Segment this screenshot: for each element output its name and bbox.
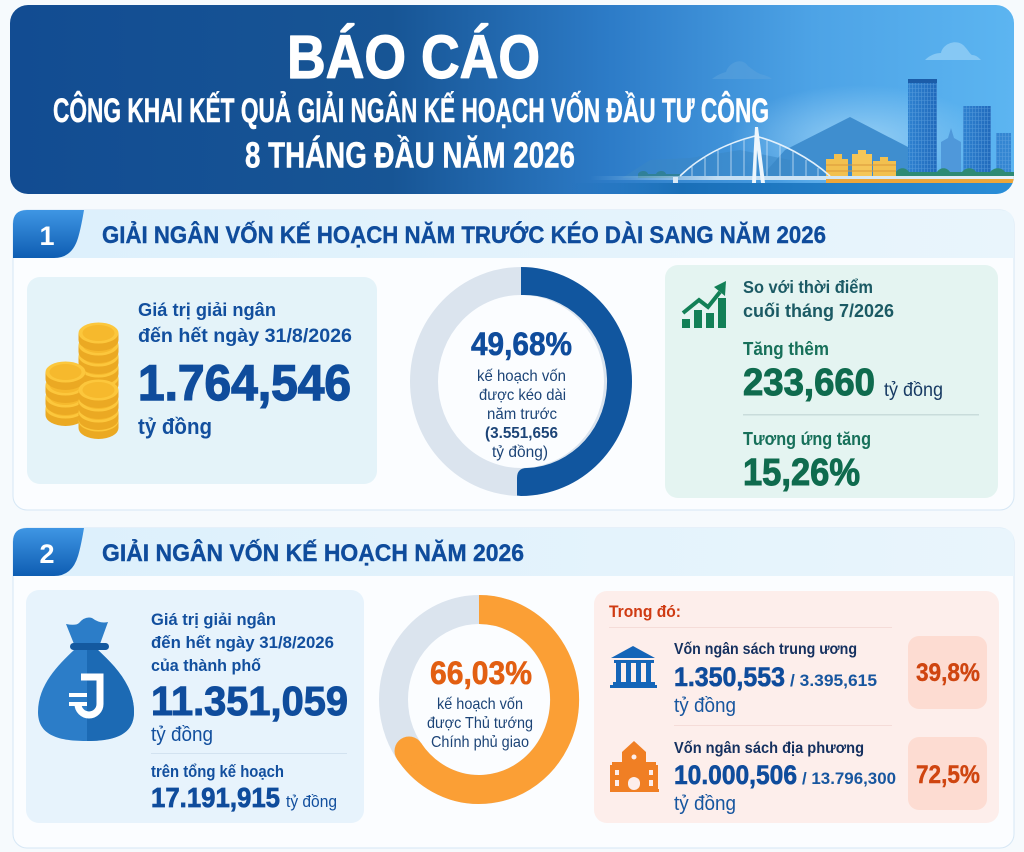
- breakdown heading: Trong đó:: [609, 602, 681, 621]
- city disbursement text: [151, 610, 348, 813]
- disbursement text: Giá trị giải ngân: [138, 299, 276, 320]
- comparison text: 233,660: [743, 362, 875, 404]
- icon: gold coins: [46, 322, 118, 439]
- comparison text: Tăng thêm: [743, 339, 829, 359]
- city disbursement text: Giá trị giải ngân: [151, 610, 276, 629]
- donut chart 49,68%: 49,68%: [471, 326, 572, 362]
- disbursement text: [138, 299, 352, 439]
- comparison text: [743, 277, 979, 494]
- row: local budget: Vốn ngân sách địa phương: [674, 740, 864, 757]
- row: local budget: tỷ đồng: [674, 793, 736, 815]
- title: 8 THÁNG ĐẦU NĂM 2026: [245, 134, 575, 176]
- section 2 heading: GIẢI NGÂN VỐN KẾ HOẠCH NĂM 2026: [102, 538, 524, 567]
- panel: disbursement value: [27, 277, 377, 484]
- city disbursement text: tỷ đồng: [151, 724, 213, 746]
- row: central budget: [610, 636, 987, 717]
- donut chart 49,68%: năm trước: [487, 406, 557, 423]
- donut chart 66,03%: được Thủ tướng: [427, 715, 533, 732]
- city disbursement text: đến hết ngày 31/8/2026: [151, 633, 334, 652]
- percent box 72,5%: 72,5%: [916, 761, 980, 789]
- percent box 72,5%: [908, 737, 987, 810]
- section 1 number tab: 1: [39, 221, 55, 251]
- row: central budget: / 3.395,615: [790, 671, 877, 690]
- row: central budget: Vốn ngân sách trung ương: [674, 641, 857, 658]
- panel: city disbursement: [26, 590, 364, 823]
- icon: money bag: [38, 618, 134, 741]
- donut chart 49,68%: kế hoạch vốn: [477, 368, 566, 385]
- donut chart 49,68%: được kéo dài: [479, 387, 566, 404]
- comparison text: tỷ đồng: [884, 380, 943, 401]
- section 1 heading: GIẢI NGÂN VỐN KẾ HOẠCH NĂM TRƯỚC KÉO DÀI SANG NĂM 2026: [102, 220, 826, 249]
- panel: budget breakdown: [594, 591, 999, 823]
- donut chart 49,68%: [424, 267, 632, 496]
- title: [53, 23, 769, 176]
- icon: rising chart: [682, 281, 726, 328]
- comparison text: Tương ứng tăng: [743, 429, 871, 449]
- city disbursement text: 17.191,915: [151, 782, 280, 813]
- comparison text: cuối tháng 7/2026: [743, 301, 894, 321]
- donut chart 49,68%: tỷ đồng): [492, 444, 548, 461]
- disbursement text: 1.764,546: [138, 355, 351, 411]
- section 2: [13, 528, 1014, 848]
- row: local budget: 10.000,506: [674, 760, 797, 790]
- illustration: city skyline and bridge: [570, 42, 1014, 195]
- donut chart 66,03%: kế hoạch vốn: [437, 696, 523, 713]
- city disbursement text: trên tổng kế hoạch: [151, 762, 284, 781]
- panel: comparison with July: [665, 265, 998, 498]
- title: BÁO CÁO: [287, 23, 540, 91]
- city disbursement text: của thành phố: [151, 656, 261, 675]
- section 2 number tab: [13, 528, 84, 576]
- percent box 39,8%: [908, 636, 987, 709]
- comparison text: So với thời điểm: [743, 277, 873, 297]
- comparison text: 15,26%: [743, 452, 860, 494]
- disbursement text: tỷ đồng: [138, 414, 212, 439]
- donut chart 66,03%: [394, 609, 565, 790]
- icon: government building: [610, 646, 657, 688]
- percent box 39,8%: 39,8%: [916, 659, 980, 687]
- section 1 number tab: [13, 210, 84, 258]
- city disbursement text: tỷ đồng: [286, 792, 337, 811]
- row: central budget: 1.350,553: [674, 662, 785, 692]
- row: local budget: / 13.796,300: [802, 769, 896, 788]
- donut chart 66,03%: Chính phủ giao: [431, 734, 529, 751]
- row: local budget: [610, 737, 987, 815]
- icon: local government hall: [610, 741, 659, 792]
- section 2 number tab: 2: [39, 539, 55, 569]
- row: central budget: tỷ đồng: [674, 695, 736, 717]
- donut chart 49,68%: (3.551,656: [485, 425, 558, 442]
- header banner: [10, 5, 1014, 195]
- section 1: [13, 210, 1014, 510]
- disbursement text: đến hết ngày 31/8/2026: [138, 326, 352, 347]
- city disbursement text: 11.351,059: [151, 678, 348, 724]
- donut chart 66,03%: 66,03%: [430, 655, 532, 691]
